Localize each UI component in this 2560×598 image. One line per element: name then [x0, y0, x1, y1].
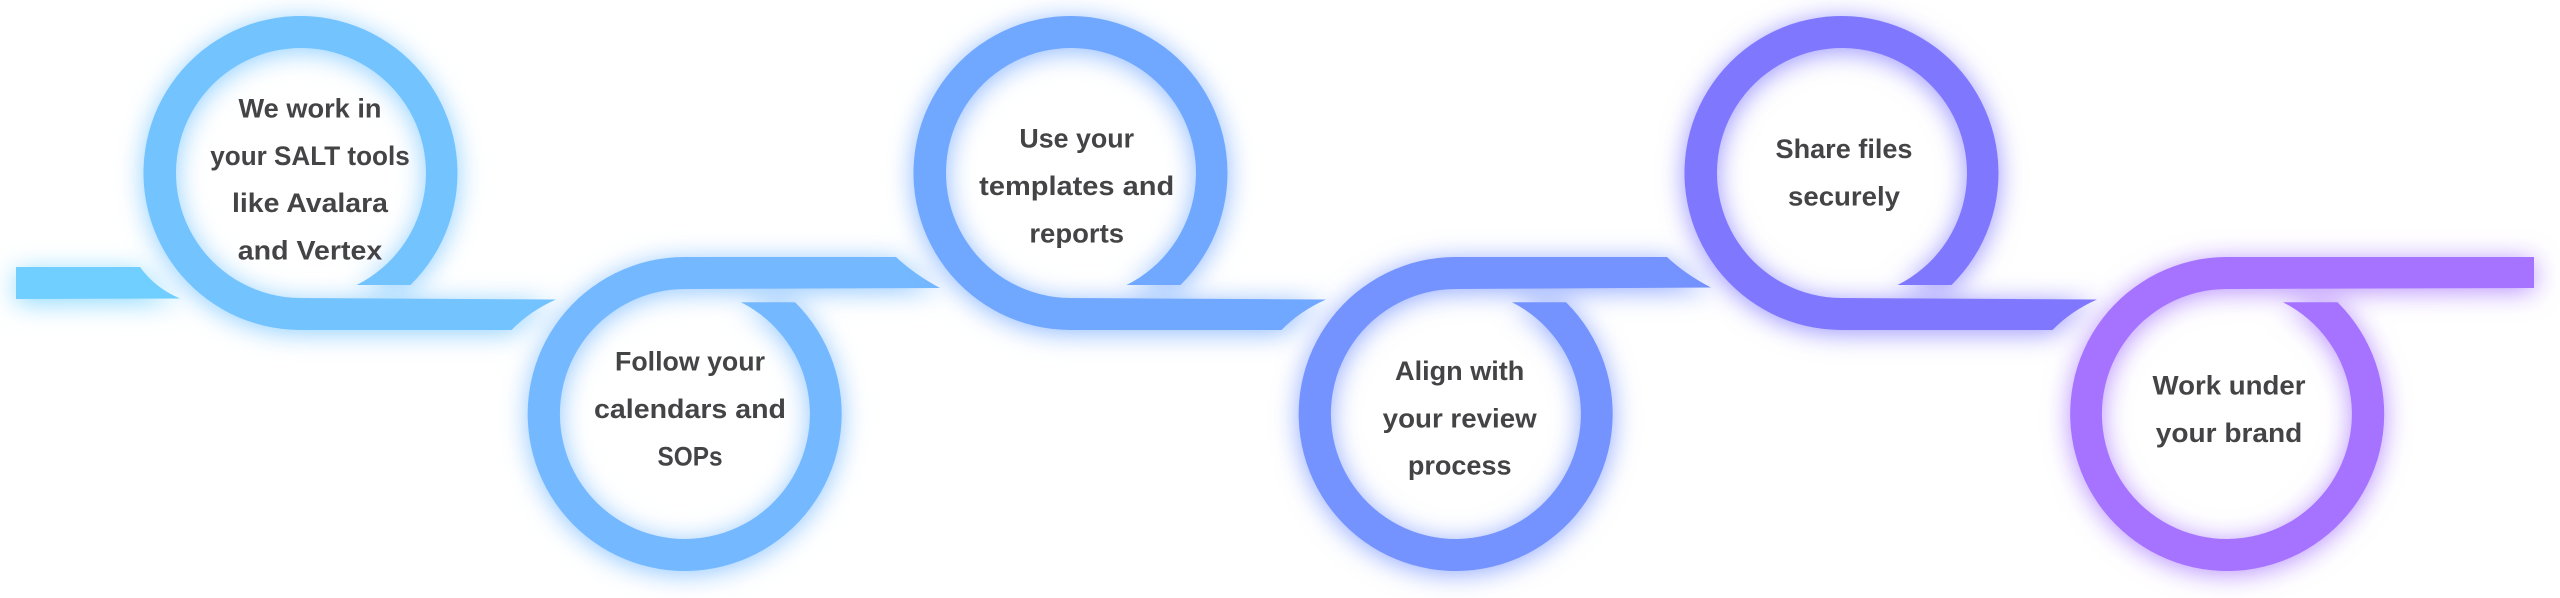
- ring ribbon 1: [143, 16, 556, 330]
- step 5: share files: [1684, 16, 2097, 330]
- label 1: your SALT tools: [210, 141, 410, 171]
- lead-in ribbon: [16, 267, 180, 299]
- label 2: [594, 347, 786, 471]
- label 5: securely: [1788, 181, 1900, 211]
- ring ribbon 4: [1299, 257, 1711, 571]
- ring ribbon 6: [2070, 257, 2534, 571]
- label 3: templates and: [979, 171, 1174, 201]
- label 1: We work in: [238, 94, 382, 124]
- ring ribbon 3: [913, 16, 1326, 330]
- ring ribbon 5: [1684, 16, 2097, 330]
- label 5: [1776, 134, 1912, 211]
- label 1: like Avalara: [232, 188, 389, 218]
- label 4: process: [1408, 451, 1512, 481]
- label 6: Work under: [2152, 371, 2306, 401]
- step 4: review process: [1299, 257, 1711, 571]
- label 4: Align with: [1395, 356, 1524, 386]
- ring ribbon 2: [528, 257, 940, 571]
- label 2: calendars and: [594, 394, 786, 424]
- label 4: [1383, 356, 1538, 481]
- label 1: [210, 94, 410, 265]
- label 4: your review: [1383, 403, 1538, 433]
- label 6: [2152, 371, 2306, 448]
- label 3: Use your: [1019, 124, 1135, 154]
- step 2: calendars and SOPs: [528, 257, 940, 571]
- label 1: and Vertex: [238, 235, 382, 265]
- label 2: Follow your: [615, 347, 765, 377]
- step 3: templates and reports: [913, 16, 1326, 330]
- label 2: SOPs: [658, 441, 722, 471]
- step 6: brand: [2070, 257, 2534, 571]
- label 3: [979, 124, 1174, 248]
- label 5: Share files: [1776, 134, 1912, 164]
- label 6: your brand: [2156, 418, 2302, 448]
- label 3: reports: [1029, 218, 1124, 248]
- step 1: SALT tools: [143, 16, 556, 330]
